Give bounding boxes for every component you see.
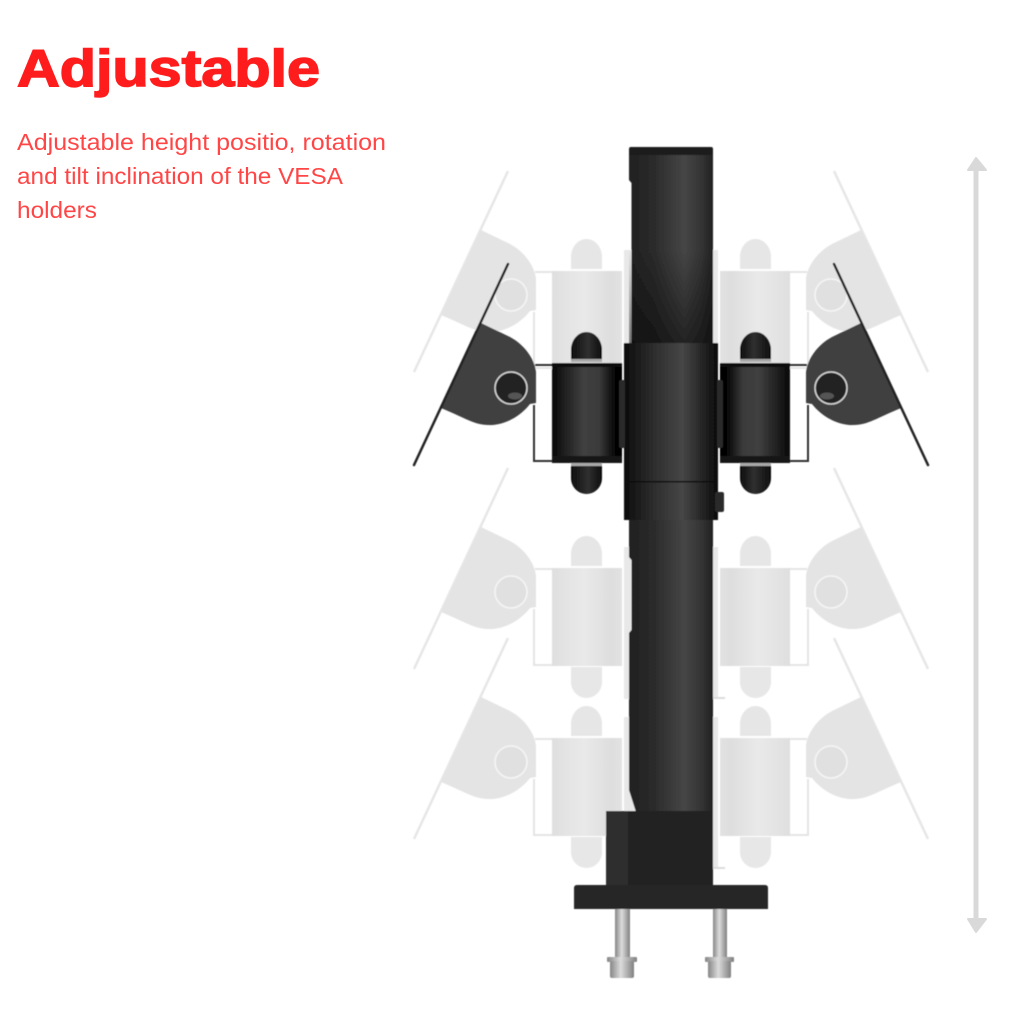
right clamp bolt (705, 909, 734, 978)
ghost position: lower (414, 638, 928, 869)
collar lock knob (715, 492, 724, 512)
description text: Adjustable height positio, rotation (17, 129, 386, 155)
sliding collar (624, 343, 718, 520)
ghost position: middle (414, 468, 928, 699)
right VESA holder (717, 264, 928, 494)
left clamp bolt (607, 909, 637, 978)
description text: and tilt inclination of the VESA (17, 163, 344, 189)
description text: holders (17, 197, 97, 223)
ghost position: top (414, 171, 928, 430)
monitor mount assembly (414, 147, 928, 978)
left VESA holder (414, 264, 625, 494)
title: Adjustable (17, 40, 320, 98)
column pole (629, 147, 713, 812)
description text (17, 129, 386, 223)
desk clamp base (574, 811, 768, 909)
height range arrow (968, 158, 986, 932)
